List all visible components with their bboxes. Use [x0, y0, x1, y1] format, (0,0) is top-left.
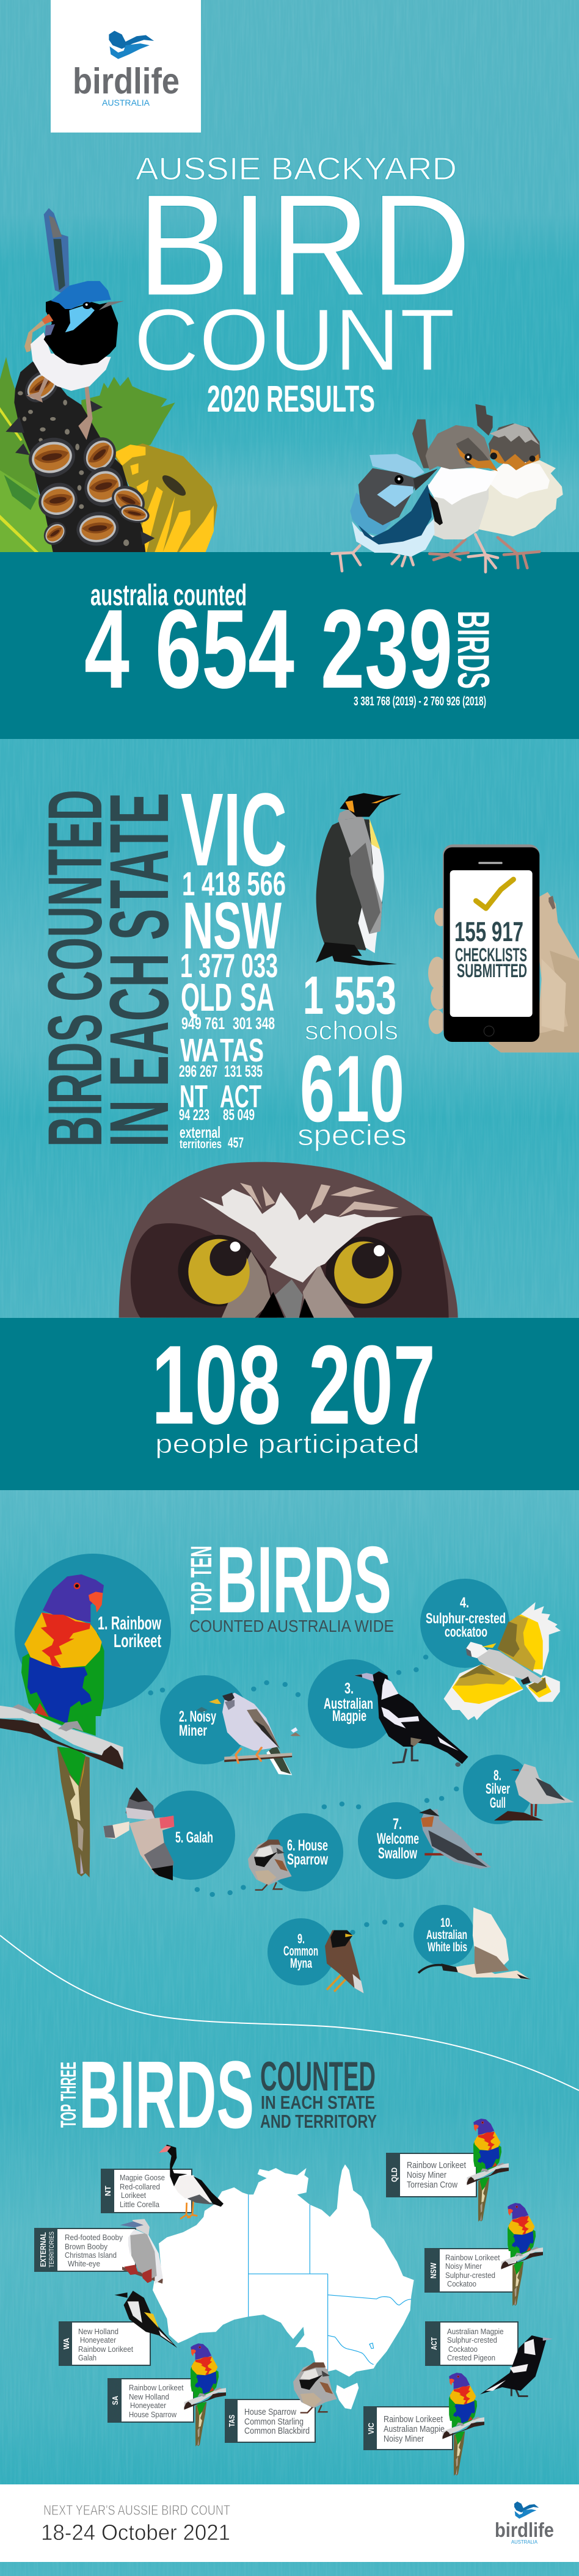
card: ACT — [426, 2322, 518, 2365]
heading: top three birds: COUNTED — [260, 2053, 376, 2100]
logo panel: AUSTRALIA — [102, 98, 150, 107]
title: 2020 RESULTS — [207, 378, 375, 420]
label: common myna: 9. — [297, 1931, 305, 1946]
card: QLD: Noisy Miner — [407, 2170, 446, 2180]
label: sulphur-crested cockatoo: Sulphur-crested — [426, 1610, 506, 1627]
label: rainbow lorikeet — [98, 1612, 162, 1651]
label: sulphur-crested cockatoo: 4. — [460, 1595, 469, 1611]
state totals: ACT — [220, 1079, 261, 1115]
label: australian magpie: 3. — [344, 1680, 354, 1697]
heading: birds counted in each state: IN EACH STATE — [93, 793, 186, 1147]
bird: sulphur-crested cockatoo — [444, 1602, 561, 1720]
footer logo — [495, 2501, 554, 2545]
card: external territories: White-eye — [68, 2259, 100, 2268]
people number: 108 — [151, 1322, 281, 1447]
state totals: external — [180, 1123, 220, 1141]
illustration: owl peeking — [119, 1162, 458, 1318]
label: common myna: Myna — [290, 1956, 312, 1971]
card: external territories: TERRITORIES — [48, 2232, 56, 2268]
label: noisy miner: Miner — [179, 1722, 207, 1739]
card: NT: Magpie Goose — [120, 2173, 165, 2182]
state totals — [179, 772, 287, 1151]
card: TAS: Common Starling — [244, 2417, 304, 2427]
label: australian white ibis: White Ibis — [428, 1940, 467, 1954]
card: NT: Little Corella — [120, 2200, 160, 2209]
heading: top ten birds — [186, 1527, 394, 1635]
card: external territories — [35, 2229, 136, 2271]
footer logo: birdlife — [495, 2519, 554, 2541]
card: SA — [108, 2379, 194, 2422]
bird: common myna — [325, 1930, 364, 1993]
card: ACT: ACT — [429, 2337, 439, 2350]
bird: noisy miner — [197, 1693, 461, 1775]
people number: 207 — [308, 1322, 435, 1447]
bird: rainbow lorikeet, VIC — [442, 2373, 484, 2476]
card: NSW: Rainbow Lorikeet — [445, 2253, 500, 2262]
card: QLD: QLD — [390, 2167, 399, 2182]
species count: species — [297, 1119, 407, 1152]
card: QLD: Rainbow Lorikeet — [407, 2161, 466, 2170]
label: welcome swallow — [377, 1816, 419, 1862]
card: SA: Rainbow Lorikeet — [129, 2383, 184, 2392]
label: australian white ibis — [426, 1916, 467, 1954]
label: house sparrow: 6. House — [287, 1837, 328, 1854]
results band — [0, 552, 579, 739]
label: sulphur-crested cockatoo: cockatoo — [445, 1624, 487, 1640]
state totals: 1 418 566 — [182, 865, 286, 903]
state totals: territories — [180, 1138, 222, 1151]
card: WA — [59, 2322, 150, 2365]
schools count — [303, 965, 398, 1046]
heading: top three birds: TOP THREE — [57, 2062, 81, 2128]
state totals: 301 348 — [233, 1014, 275, 1033]
card: TAS: House Sparrow — [244, 2407, 296, 2417]
map of australia — [153, 2164, 414, 2409]
total birds number: 239 — [321, 586, 453, 711]
state totals: NT — [180, 1079, 208, 1115]
logo panel: birdlife — [73, 61, 180, 101]
state totals: 296 267 — [179, 1062, 217, 1080]
label: sulphur-crested cockatoo — [426, 1595, 506, 1640]
label: australian magpie: Australian — [324, 1695, 373, 1712]
footer panel — [0, 2484, 579, 2562]
label: common myna — [283, 1931, 318, 1971]
label: australian magpie — [324, 1680, 373, 1725]
state totals: TAS — [220, 1032, 264, 1069]
next count dates: 18-24 October 2021 — [41, 2520, 230, 2545]
heading: birds counted in each state: BIRDS COUNTED — [33, 790, 118, 1147]
next year's count: NEXT YEAR'S AUSSIE BIRD COUNT — [43, 2502, 230, 2518]
bird: house sparrow, TAS — [293, 2362, 337, 2413]
card: WA: Galah — [78, 2353, 96, 2362]
bird: australian magpie — [354, 1672, 468, 1764]
total birds number: 4 — [84, 586, 129, 711]
card: SA: SA — [111, 2395, 120, 2405]
label: silver gull: 8. — [493, 1767, 501, 1784]
heading: top three birds: IN EACH STATE — [261, 2092, 375, 2113]
card: VIC: Australian Magpie — [384, 2425, 445, 2434]
total birds number: 654 — [155, 586, 294, 711]
bird: house sparrow — [248, 1839, 292, 1890]
card: QLD — [387, 2153, 476, 2197]
label: welcome swallow: 7. — [393, 1816, 402, 1833]
card: ACT: Australian Magpie — [447, 2327, 503, 2336]
heading: top ten birds: COUNTED AUSTRALIA WIDE — [189, 1617, 394, 1635]
logo panel — [51, 0, 201, 133]
card: external territories: Red-footed Booby — [65, 2233, 123, 2242]
bird: new holland honeyeater — [114, 2291, 177, 2348]
bird: galah — [103, 1787, 174, 1880]
card: NSW — [425, 2249, 517, 2292]
label: rainbow lorikeet: Lorikeet — [114, 1630, 161, 1651]
label: silver gull: Gull — [490, 1795, 506, 1811]
label: welcome swallow: Swallow — [378, 1845, 417, 1862]
label: australian white ibis: 10. — [440, 1916, 453, 1930]
state totals: WA — [180, 1032, 219, 1069]
label: noisy miner: 2. Noisy — [179, 1708, 216, 1725]
heading: top three birds: AND TERRITORY — [260, 2111, 377, 2132]
card: TAS — [225, 2400, 315, 2442]
birds vertical label: BIRDS — [448, 611, 498, 689]
label: silver gull: Silver — [486, 1781, 510, 1797]
state totals: 94 223 — [179, 1107, 209, 1124]
card: QLD: Torresian Crow — [407, 2180, 457, 2190]
illustration: banksia and superb fairy-wren — [0, 208, 217, 552]
card: VIC: Noisy Miner — [384, 2434, 424, 2444]
participants band — [0, 1318, 579, 1490]
checklists submitted text: CHECKLISTS — [455, 944, 527, 966]
heading: birds counted in each state — [33, 790, 186, 1147]
checklists submitted text — [454, 916, 527, 981]
title — [134, 151, 472, 420]
card: ACT: Sulphur-crested — [447, 2335, 497, 2345]
card: VIC — [364, 2407, 453, 2450]
state totals: 85 049 — [223, 1107, 255, 1124]
bird: welcome swallow — [419, 1808, 491, 1869]
bird: silver gull — [494, 1764, 574, 1821]
card: WA: WA — [62, 2337, 71, 2349]
heading: top ten birds: TOP TEN — [186, 1546, 218, 1614]
card: external territories: Brown Booby — [65, 2242, 107, 2251]
label: house sparrow: Sparrow — [287, 1851, 328, 1868]
heading: top ten birds: BIRDS — [216, 1527, 391, 1632]
card: WA: Rainbow Lorikeet — [78, 2345, 133, 2354]
state totals: 949 761 — [181, 1014, 225, 1033]
card: SA: House Sparrow — [129, 2410, 177, 2419]
state totals: SA — [240, 975, 274, 1019]
bird: rainbow lorikeet, QLD — [467, 2119, 509, 2222]
schools count: schools — [305, 1016, 398, 1046]
illustration: three fairy-wrens on the band — [332, 404, 563, 572]
card: WA: New Holland — [78, 2327, 118, 2336]
people participated label: people participated — [155, 1429, 420, 1459]
species count: 610 — [300, 1036, 404, 1141]
logo bird mark — [109, 31, 154, 59]
card: SA: Honeyeater — [130, 2401, 167, 2410]
title: BIRD — [137, 164, 472, 326]
card: NSW: Sulphur-crested — [445, 2271, 495, 2280]
label: rainbow lorikeet: 1. Rainbow — [98, 1612, 162, 1634]
label: australian white ibis: Australian — [426, 1928, 467, 1942]
checklists submitted text: SUBMITTED — [457, 959, 527, 981]
state totals: 1 377 033 — [180, 947, 278, 984]
footer logo: AUSTRALIA — [511, 2539, 537, 2545]
label: australian magpie: Magpie — [332, 1708, 366, 1725]
state totals: NSW — [183, 889, 282, 963]
bird: magpie, ACT — [480, 2335, 553, 2396]
heading: top three birds: BIRDS — [79, 2042, 254, 2148]
total birds number — [84, 586, 453, 711]
illustration: hand holding phone — [428, 845, 579, 1052]
card: NT: NT — [103, 2186, 112, 2196]
title: COUNT — [134, 291, 455, 389]
card: ACT: Cockatoo — [448, 2345, 478, 2354]
label: house sparrow — [287, 1837, 328, 1868]
label: welcome swallow: Welcome — [377, 1830, 419, 1847]
state totals: 457 — [228, 1135, 244, 1151]
schools count: 1 553 — [303, 965, 396, 1025]
state totals: 131 535 — [224, 1062, 263, 1080]
illustration: king penguin — [316, 793, 402, 966]
card: NSW: Cockatoo — [447, 2279, 476, 2288]
decorative white curve — [0, 1935, 579, 2090]
bird: red-footed booby — [120, 2219, 163, 2284]
card: ACT: Crested Pigeon — [447, 2353, 495, 2362]
card: external territories: Christmas Island — [65, 2250, 117, 2260]
checklists submitted text: 155 917 — [454, 916, 523, 947]
bird: magpie goose — [159, 2145, 224, 2219]
card: VIC: VIC — [366, 2422, 376, 2434]
state totals: VIC — [181, 772, 287, 888]
australia counted label: australia counted — [90, 579, 247, 612]
card: TAS: TAS — [227, 2415, 236, 2427]
state totals: QLD — [181, 975, 232, 1019]
bird: rainbow lorikeet — [0, 1574, 123, 1877]
title: AUSSIE BACKYARD — [136, 151, 457, 187]
ranking circles and connecting dots — [15, 1554, 533, 1985]
bird: rainbow lorikeet, NSW — [501, 2203, 543, 2306]
card: WA: Honeyeater — [80, 2335, 117, 2345]
card: TAS: Common Blackbird — [244, 2426, 310, 2436]
card: VIC: Rainbow Lorikeet — [384, 2415, 443, 2425]
species count — [297, 1036, 407, 1152]
bird: rainbow lorikeet, SA — [184, 2343, 226, 2447]
card: SA: New Holland — [129, 2392, 169, 2401]
card: external territories: EXTERNAL — [39, 2232, 48, 2267]
card: NT — [101, 2169, 192, 2213]
label: noisy miner — [179, 1708, 216, 1739]
label: common myna: Common — [283, 1943, 318, 1959]
label: silver gull — [486, 1767, 510, 1811]
previous years: 3 381 768 (2019) - 2 760 926 (2018) — [354, 694, 486, 708]
card: NT: Lorikeet — [121, 2191, 146, 2200]
card: NSW: NSW — [429, 2262, 438, 2279]
bird: australian white ibis — [418, 1907, 531, 1979]
card: NSW: Noisy Miner — [445, 2261, 482, 2271]
people number — [151, 1322, 435, 1447]
label: galah: 5. Galah — [175, 1829, 213, 1846]
card: NT: Red-collared — [120, 2182, 160, 2191]
